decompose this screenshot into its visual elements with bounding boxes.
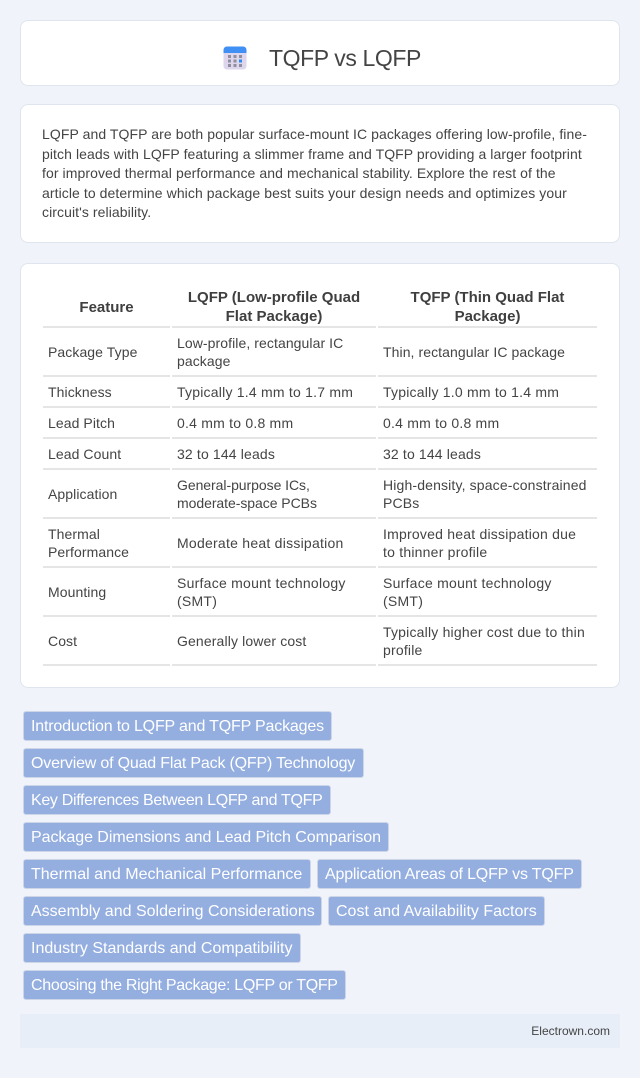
table header: Feature xyxy=(79,299,134,316)
icon: chip calendar xyxy=(224,46,246,70)
table rows: General-purpose ICs, xyxy=(177,477,310,493)
table rows: Package Type xyxy=(48,344,137,360)
topic links: Overview of Quad Flat Pack (QFP) Technology xyxy=(31,755,355,772)
table rows: Thickness xyxy=(48,384,112,400)
footer xyxy=(20,1014,620,1048)
table rows: Low-profile, rectangular IC xyxy=(177,335,343,351)
comparison table panel xyxy=(20,263,620,688)
intro panel xyxy=(20,104,620,243)
table rows: High-density, space-constrained xyxy=(383,477,587,493)
footer credit: Electrown.com xyxy=(531,1024,610,1038)
table rows: Application xyxy=(48,486,117,502)
topic links: Assembly and Soldering Considerations xyxy=(31,903,315,920)
table rows: 32 to 144 leads xyxy=(383,446,481,462)
table rows: (SMT) xyxy=(177,593,217,609)
table header xyxy=(79,289,564,325)
table rows: Surface mount technology xyxy=(383,575,552,591)
title text: TQFP vs LQFP xyxy=(269,45,421,71)
table rows: 0.4 mm to 0.8 mm xyxy=(383,415,499,431)
table rows xyxy=(43,326,597,666)
table rows: Typically higher cost due to thin xyxy=(383,624,585,640)
table rows: Thermal xyxy=(48,526,100,542)
table header: TQFP (Thin Quad Flat xyxy=(411,289,564,306)
table rows: Thin, rectangular IC package xyxy=(383,344,565,360)
table rows: Typically 1.0 mm to 1.4 mm xyxy=(383,384,559,400)
table rows: (SMT) xyxy=(383,593,423,609)
table rows: Improved heat dissipation due xyxy=(383,526,576,542)
table rows: moderate-space PCBs xyxy=(177,495,317,511)
table rows: Generally lower cost xyxy=(177,633,306,649)
table rows: Typically 1.4 mm to 1.7 mm xyxy=(177,384,353,400)
topic links: Thermal and Mechanical Performance xyxy=(31,866,302,883)
topic links: Cost and Availability Factors xyxy=(336,903,537,920)
table header: Flat Package) xyxy=(226,308,322,325)
intro paragraph: pitch leads with LQFP featuring a slimmer frame and TQFP providing a larger footprint xyxy=(42,146,582,162)
title card xyxy=(20,20,620,86)
topic links: Industry Standards and Compatibility xyxy=(31,940,292,957)
table rows: Lead Pitch xyxy=(48,415,115,431)
table rows: Mounting xyxy=(48,584,106,600)
table rows: profile xyxy=(383,642,423,658)
topic links: Choosing the Right Package: LQFP or TQFP xyxy=(31,977,338,994)
topic links: Package Dimensions and Lead Pitch Comparison xyxy=(31,829,381,846)
table rows: 0.4 mm to 0.8 mm xyxy=(177,415,293,431)
intro paragraph xyxy=(42,126,587,220)
table rows: package xyxy=(177,353,230,369)
table rows: 32 to 144 leads xyxy=(177,446,275,462)
table rows: Performance xyxy=(48,544,129,560)
topic links: Introduction to LQFP and TQFP Packages xyxy=(31,718,324,735)
intro paragraph: article to determine which package best suits your design needs and optimizes your xyxy=(42,184,567,200)
table rows: Cost xyxy=(48,633,77,649)
table header: LQFP (Low-profile Quad xyxy=(188,289,360,306)
table rows: PCBs xyxy=(383,495,419,511)
intro paragraph: for improved thermal performance and mechanical stability. Explore the rest of the xyxy=(42,165,556,181)
topic links: Key Differences Between LQFP and TQFP xyxy=(31,792,322,809)
table rows: Lead Count xyxy=(48,446,121,462)
table rows: Moderate heat dissipation xyxy=(177,535,344,551)
table rows: to thinner profile xyxy=(383,544,487,560)
intro paragraph: LQFP and TQFP are both popular surface-mount IC packages offering low-profile, fine- xyxy=(42,126,587,142)
intro paragraph: circuit's reliability. xyxy=(42,204,151,220)
table rows: Surface mount technology xyxy=(177,575,346,591)
table header: Package) xyxy=(455,308,520,325)
topic links: Application Areas of LQFP vs TQFP xyxy=(325,866,574,883)
topic links xyxy=(23,711,582,1000)
